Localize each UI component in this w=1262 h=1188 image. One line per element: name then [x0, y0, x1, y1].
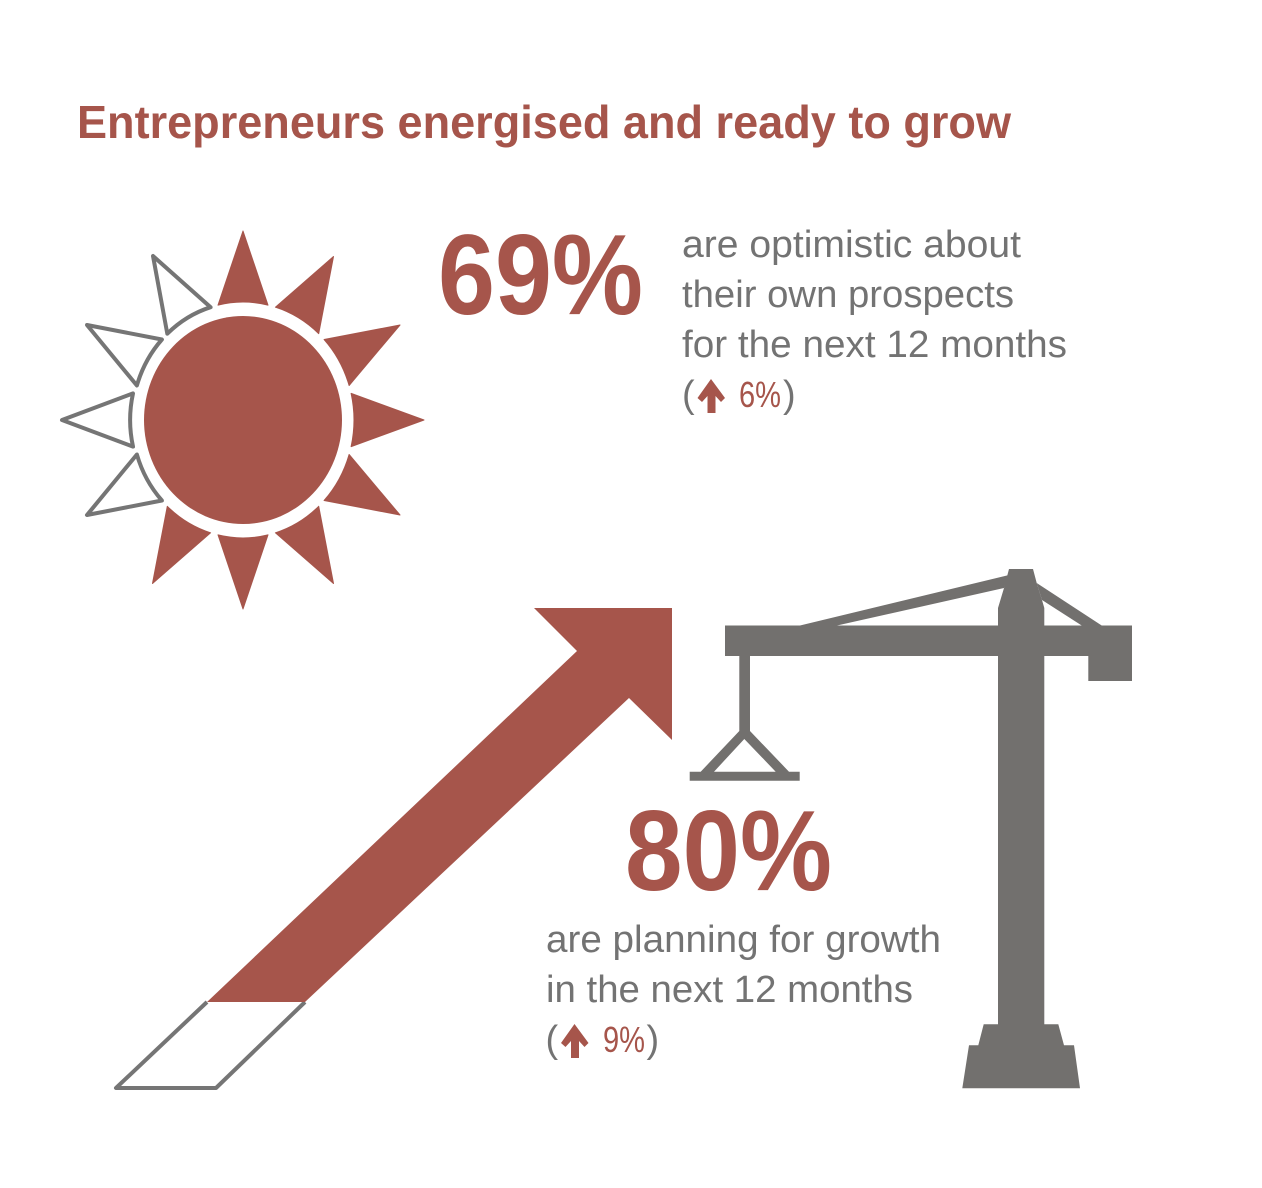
- title: Entrepreneurs energised and ready to grow: [77, 96, 1011, 148]
- crane front stay: [1037, 583, 1102, 626]
- text block: growth description: 9%: [603, 1019, 645, 1060]
- text block: optimism description: are optimistic about: [682, 224, 1021, 266]
- icon: up arrow: [561, 1024, 588, 1058]
- text block: growth description: [546, 919, 941, 1061]
- text block: growth description: are planning for growth: [546, 919, 941, 961]
- filled rays: [152, 231, 424, 609]
- text block: optimism description: for the next 12 months: [682, 324, 1067, 366]
- text block: optimism description: 6%: [739, 374, 781, 415]
- crane counterweight: [1088, 650, 1132, 681]
- icon: up arrow: [698, 379, 725, 413]
- text block: growth description: in the next 12 months: [546, 969, 913, 1011]
- icon: tower crane: [690, 569, 1132, 1088]
- text block: optimism description: their own prospects: [682, 274, 1014, 316]
- crane jib: [725, 626, 1132, 656]
- stat: 80%: 80%: [625, 788, 832, 915]
- arrow filled body: [207, 608, 672, 1002]
- crane base: [962, 1024, 1080, 1088]
- crane rear stay: [800, 575, 1009, 626]
- crane hook: [690, 656, 800, 781]
- arrow outlined tail: [116, 1002, 305, 1088]
- text block: growth description: (: [546, 1019, 558, 1061]
- sun disc: [144, 316, 342, 524]
- crane mast and peak: [998, 569, 1044, 1030]
- text block: optimism description: ): [783, 374, 796, 416]
- outlined rays: [62, 256, 211, 515]
- text block: growth description: ): [646, 1019, 659, 1061]
- stat: 69%: 69%: [438, 212, 643, 339]
- text block: optimism description: (: [682, 374, 695, 416]
- icon: rising arrow: [116, 608, 672, 1088]
- icon: sun with 12 rays, 8 filled and 4 outlined: [62, 231, 424, 609]
- text block: optimism description: [682, 224, 1067, 416]
